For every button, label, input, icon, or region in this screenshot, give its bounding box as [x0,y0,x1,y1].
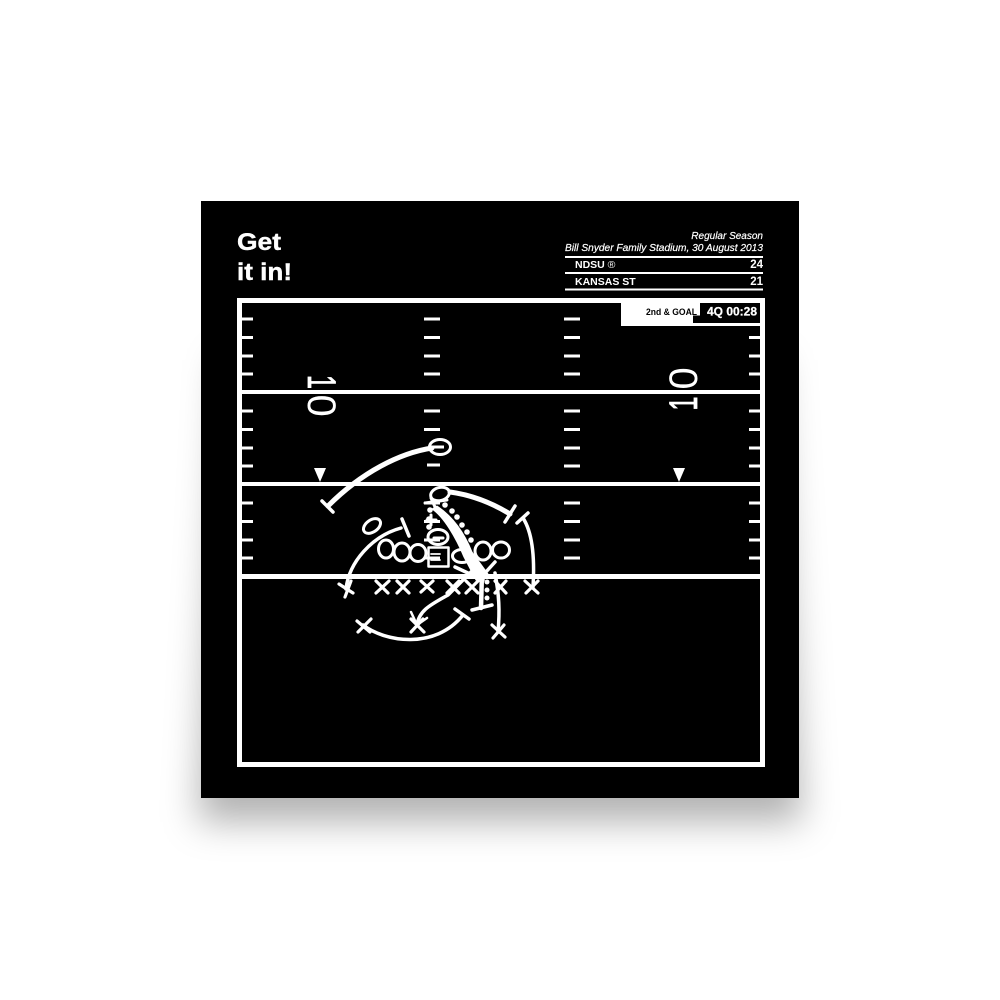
football field [240,300,762,764]
yard lines [240,390,762,579]
yard number left: 1 [299,375,343,389]
yard number left: 0 [299,394,343,417]
poster background [201,201,799,798]
down and distance box: 4Q 00:28 [707,304,757,318]
title: it in! [237,259,292,286]
game info: Regular Season [691,231,763,242]
ball carrier run [432,506,488,608]
yard number right: 0 [662,367,706,390]
game info [565,231,763,254]
scoreboard: NDSU ® [575,259,616,271]
first down marker right [673,468,685,482]
scoreboard [565,256,764,290]
first down marker left [314,468,326,482]
play diagram [322,440,538,640]
defense players [339,581,538,638]
scoreboard: 21 [750,276,764,288]
thick blocking routes [322,448,515,522]
scoreboard: KANSAS ST [575,276,636,288]
field boundary [240,300,762,764]
yard number right: 1 [662,396,706,410]
offense players [361,440,510,566]
title [237,229,292,286]
game info: Bill Snyder Family Stadium, 30 August 2013 [565,243,763,254]
poster shadow [178,380,822,844]
hash marks [242,319,760,558]
thin routes [346,513,534,640]
dotted pass route [426,502,490,600]
down and distance box: 2nd & GOAL [646,307,697,317]
yard number right [662,367,706,410]
down and distance box [621,303,760,326]
scoreboard: 24 [750,259,764,271]
title: Get [237,229,281,256]
yard number left [299,375,343,417]
